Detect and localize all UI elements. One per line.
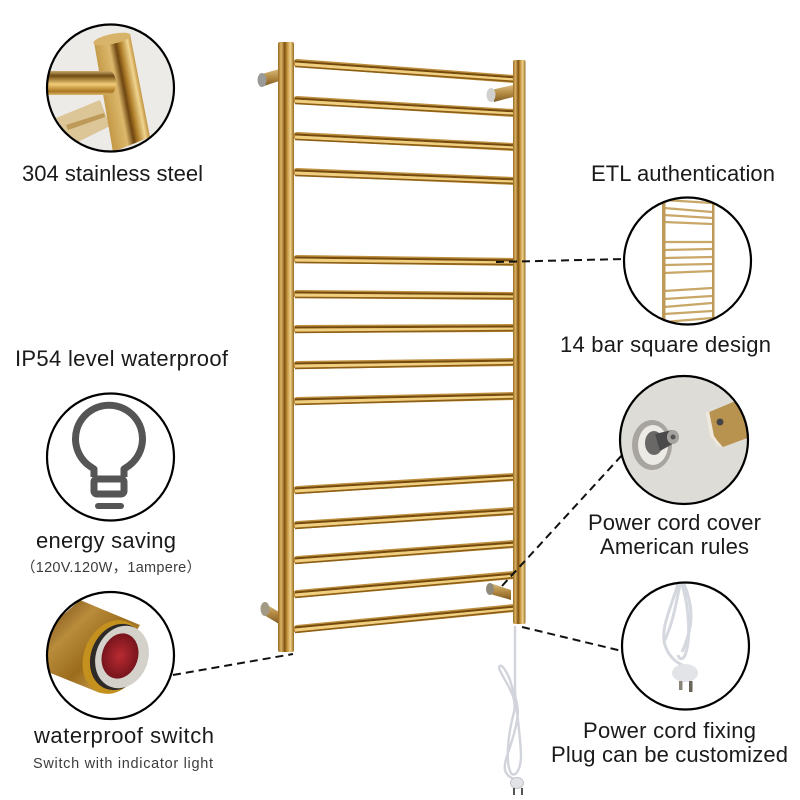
power cord with plug — [499, 626, 524, 795]
wall standoffs — [258, 69, 513, 624]
label: IP54 level waterproof: IP54 level waterproof — [15, 346, 229, 371]
label: waterproof switch: waterproof switch — [33, 723, 214, 748]
label: Plug can be customized: Plug can be customized — [551, 742, 788, 767]
callout: waterproof switch circle — [46, 592, 174, 719]
label: power rating: （120V.120W，1ampere） — [21, 559, 201, 576]
callout: stainless steel detail circle — [47, 24, 174, 152]
label: switch note: Switch with indicator light — [33, 756, 213, 772]
towel bars — [295, 62, 516, 632]
label: energy saving: energy saving — [36, 528, 176, 553]
label: 304 stainless steel: 304 stainless steel — [22, 161, 203, 186]
label: 14 bar square design: 14 bar square design — [560, 332, 771, 357]
left post — [278, 42, 294, 652]
label: Power cord cover: Power cord cover — [588, 510, 761, 535]
callout: power cord cover circle — [620, 376, 750, 504]
callout: power cord plug circle — [622, 582, 749, 710]
label: American rules: American rules — [600, 534, 749, 559]
callout: 14 bar design circle — [624, 190, 751, 330]
icon: light bulb — [76, 405, 143, 506]
leader lines — [173, 259, 624, 675]
product: gold towel rail — [258, 42, 526, 795]
right post — [513, 60, 526, 624]
label: ETL authentication: ETL authentication — [591, 161, 775, 186]
callout: energy saving bulb icon — [47, 394, 174, 520]
label: Power cord fixing: Power cord fixing — [583, 718, 756, 743]
